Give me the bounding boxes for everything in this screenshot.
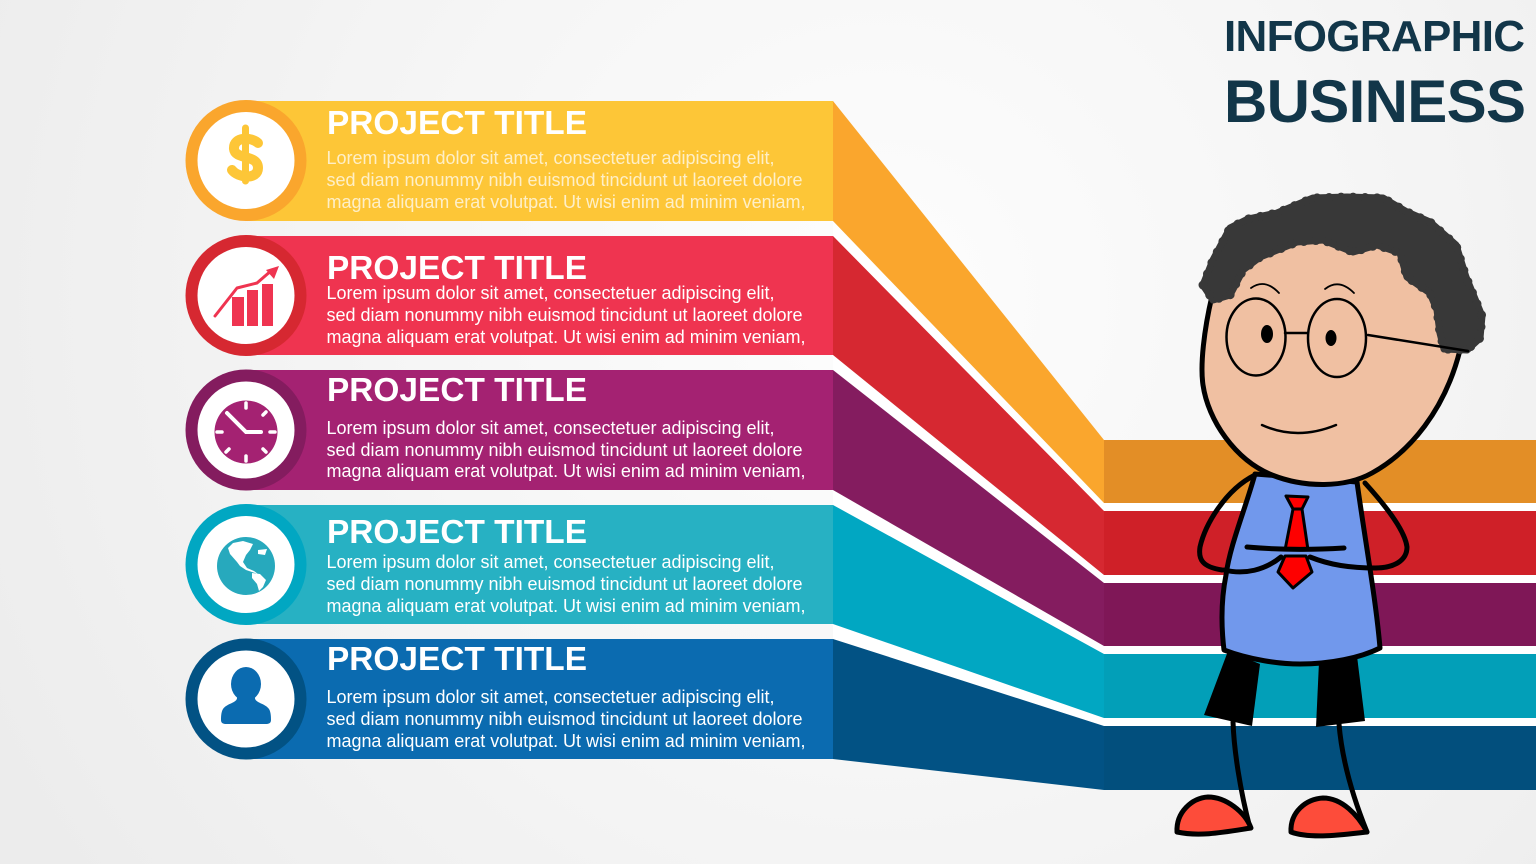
shoes	[1177, 797, 1367, 836]
ribbon 1: yellow	[833, 101, 1536, 503]
ribbon 3: purple	[833, 370, 1536, 646]
title	[1224, 12, 1526, 135]
panel: project 4	[186, 504, 833, 625]
ribbon 5: navy	[833, 639, 1536, 790]
ribbon 2: red	[833, 236, 1536, 575]
text block: Lorem ipsum dolor sit amet, consectetuer adipiscing elit,	[326, 283, 774, 303]
text block: sed diam nonummy nibh euismod tincidunt ut laoreet dolore	[326, 305, 802, 325]
panel: project 3	[186, 370, 833, 490]
text block: magna aliquam erat volutpat. Ut wisi enim ad minim veniam,	[326, 192, 806, 212]
panel: project 2	[186, 235, 833, 356]
icon: clock	[186, 370, 306, 490]
heading: PROJECT TITLE	[327, 641, 587, 678]
legs	[1233, 722, 1367, 832]
hair curls	[1203, 197, 1482, 350]
white gaps between ribbons	[833, 221, 1536, 726]
head	[1202, 224, 1460, 485]
eyes	[1261, 325, 1336, 346]
icon: globe	[186, 504, 306, 625]
text block	[326, 148, 806, 212]
glasses	[1226, 298, 1468, 377]
text block: Lorem ipsum dolor sit amet, consectetuer adipiscing elit,	[326, 552, 774, 572]
text block: magna aliquam erat volutpat. Ut wisi enim ad minim veniam,	[326, 327, 806, 347]
text block: magna aliquam erat volutpat. Ut wisi enim ad minim veniam,	[326, 596, 806, 616]
heading: PROJECT TITLE	[327, 514, 587, 551]
text block: Lorem ipsum dolor sit amet, consectetuer adipiscing elit,	[326, 148, 774, 168]
heading: PROJECT TITLE	[327, 372, 587, 409]
text block: sed diam nonummy nibh euismod tincidunt ut laoreet dolore	[326, 574, 802, 594]
shorts	[1204, 651, 1365, 727]
heading: PROJECT TITLE	[327, 250, 587, 287]
panel: project 1	[186, 100, 833, 221]
title: BUSINESS	[1224, 68, 1526, 135]
text block: Lorem ipsum dolor sit amet, consectetuer adipiscing elit,	[326, 687, 774, 707]
hair	[1203, 197, 1482, 350]
text block	[326, 418, 806, 481]
eyebrows	[1251, 284, 1354, 293]
text block	[326, 283, 806, 347]
crossed arms	[1224, 547, 1376, 572]
text block: Lorem ipsum dolor sit amet, consectetuer adipiscing elit,	[326, 418, 774, 438]
ribbon 4: teal	[833, 505, 1536, 718]
title: INFOGRAPHIC	[1224, 12, 1525, 61]
hair and head	[1202, 197, 1482, 485]
text block	[326, 552, 806, 616]
text block: sed diam nonummy nibh euismod tincidunt ut laoreet dolore	[326, 709, 802, 729]
icon: growth chart	[186, 235, 306, 356]
icon: person	[186, 638, 306, 760]
panel: project 5	[186, 638, 833, 760]
text block: sed diam nonummy nibh euismod tincidunt ut laoreet dolore	[326, 170, 802, 190]
text block	[326, 687, 806, 751]
tie	[1278, 496, 1312, 588]
shirt	[1222, 474, 1380, 664]
character: businessman	[1177, 197, 1482, 836]
text block: magna aliquam erat volutpat. Ut wisi enim ad minim veniam,	[326, 461, 806, 481]
icon: dollar	[186, 100, 306, 221]
text block: sed diam nonummy nibh euismod tincidunt ut laoreet dolore	[326, 440, 802, 460]
text block: magna aliquam erat volutpat. Ut wisi enim ad minim veniam,	[326, 731, 806, 751]
arms back	[1200, 475, 1407, 570]
smile	[1262, 425, 1336, 433]
heading: PROJECT TITLE	[327, 105, 587, 142]
